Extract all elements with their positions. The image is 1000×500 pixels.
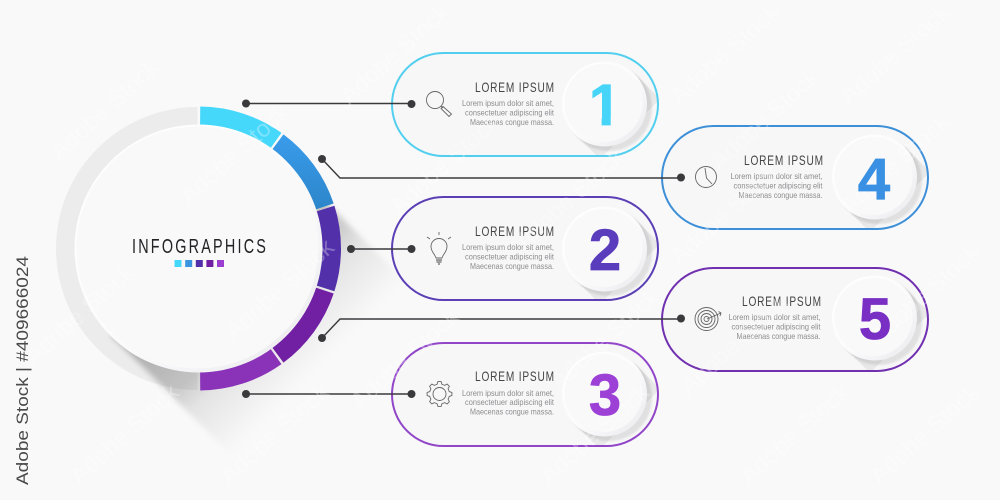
connector 2 — [347, 245, 416, 253]
panel: step 4 — [662, 126, 930, 232]
icon: light bulb — [427, 232, 451, 264]
watermark pattern: Adobe Stock — [510, 143, 630, 255]
watermark pattern: Adobe Stock — [20, 258, 140, 370]
connector 1 — [242, 100, 416, 108]
number 1: 1 — [589, 73, 621, 138]
number disc shadow — [846, 286, 926, 370]
number disc — [832, 276, 917, 360]
ring segment 2 blue — [256, 134, 349, 219]
watermark pattern: Adobe Stock — [345, 303, 465, 415]
watermark pattern: Adobe Stock — [175, 98, 295, 210]
description — [728, 312, 821, 341]
number 2: 2 — [589, 218, 621, 283]
watermark pattern: Adobe Stock — [675, 288, 795, 400]
ring segment 4 purple — [265, 279, 334, 371]
label: LOREM IPSUM — [744, 153, 823, 168]
description: Lorem ipsum dolor sit amet, — [728, 312, 820, 322]
watermark pattern: Adobe Stock — [835, 0, 955, 110]
number disc shadow — [576, 362, 657, 445]
stock id side label: Adobe Stock | #409666024 — [13, 256, 32, 485]
centre disc — [74, 124, 322, 372]
label: LOREM IPSUM — [475, 80, 554, 95]
description: consectetuer adipiscing elit — [465, 252, 555, 262]
description: Lorem ipsum dolor sit amet, — [462, 388, 554, 398]
description: Maecenas congue massa. — [470, 261, 554, 271]
panel: central donut — [56, 106, 410, 460]
description: consectetuer adipiscing elit — [732, 322, 821, 332]
description: Lorem ipsum dolor sit amet, — [462, 242, 554, 252]
connector 5 — [318, 314, 685, 342]
number disc shadow — [576, 217, 657, 299]
description: Maecenas congue massa. — [470, 117, 554, 127]
number disc — [562, 352, 647, 436]
pill outline — [392, 53, 658, 156]
description: Lorem ipsum dolor sit amet, — [730, 171, 822, 181]
number disc — [562, 62, 647, 146]
watermark pattern: Adobe Stock — [865, 378, 985, 490]
grey background ring — [56, 107, 197, 390]
panel: step 3 — [392, 343, 660, 449]
description: Lorem ipsum dolor sit amet, — [462, 98, 554, 108]
label: LOREM IPSUM — [475, 369, 554, 384]
description — [462, 242, 555, 271]
description — [462, 388, 555, 416]
number disc shadow — [576, 72, 657, 155]
panel: step 5 — [662, 268, 930, 373]
panel: step 1 — [392, 53, 660, 159]
icon: clock — [696, 166, 716, 188]
connector 3 — [242, 390, 416, 398]
connector 4 — [318, 155, 685, 182]
pill outline — [392, 343, 658, 446]
icon: magnifier — [426, 92, 452, 116]
icon: gear — [427, 382, 452, 406]
number disc shadow — [846, 146, 927, 228]
watermark pattern: Adobe Stock — [65, 378, 185, 490]
label: LOREM IPSUM — [742, 294, 821, 309]
watermark pattern: Adobe Stock — [865, 238, 985, 350]
number disc — [562, 206, 647, 292]
icon: target — [695, 308, 721, 330]
watermark pattern: Adobe Stock — [705, 63, 825, 175]
watermark pattern: Adobe Stock — [220, 233, 340, 345]
pill outline — [662, 126, 928, 229]
watermark pattern: Adobe Stock — [385, 108, 505, 220]
description: Maecenas congue massa. — [470, 406, 554, 416]
ring segment 5 violet — [189, 327, 282, 412]
description: consectetuer adipiscing elit — [465, 108, 555, 118]
watermark pattern: Adobe Stock — [665, 158, 785, 270]
description — [462, 98, 555, 127]
watermark pattern: Adobe Stock — [335, 0, 455, 110]
description — [730, 171, 823, 200]
description: consectetuer adipiscing elit — [465, 397, 555, 407]
ring segment 1 cyan — [200, 106, 281, 152]
pill outline — [662, 268, 928, 371]
number 3: 3 — [589, 363, 621, 428]
number 5: 5 — [859, 287, 891, 352]
watermark pattern: Adobe Stock — [545, 283, 665, 395]
watermark pattern: Adobe Stock — [45, 53, 165, 165]
long shadow of centre disc — [111, 161, 410, 460]
panel: step 2 — [392, 197, 660, 304]
description: Maecenas congue massa. — [736, 331, 820, 341]
connector lines — [242, 100, 685, 398]
heading: infographics: INFOGRAPHICS — [132, 235, 266, 258]
watermark pattern: Adobe Stock — [735, 378, 855, 490]
legend squares — [174, 260, 224, 267]
watermark pattern: Adobe Stock — [535, 378, 655, 490]
watermark pattern: Adobe Stock — [665, 0, 785, 110]
ring segment 3 indigo — [291, 206, 360, 297]
description: consectetuer adipiscing elit — [734, 180, 823, 190]
number disc — [832, 134, 917, 220]
watermark pattern: Adobe Stock — [215, 378, 335, 490]
watermark pattern: Adobe Stock — [835, 108, 955, 220]
pill outline — [392, 197, 658, 300]
number 4: 4 — [858, 147, 890, 212]
label: LOREM IPSUM — [475, 224, 554, 239]
description: Maecenas congue massa. — [738, 190, 822, 200]
